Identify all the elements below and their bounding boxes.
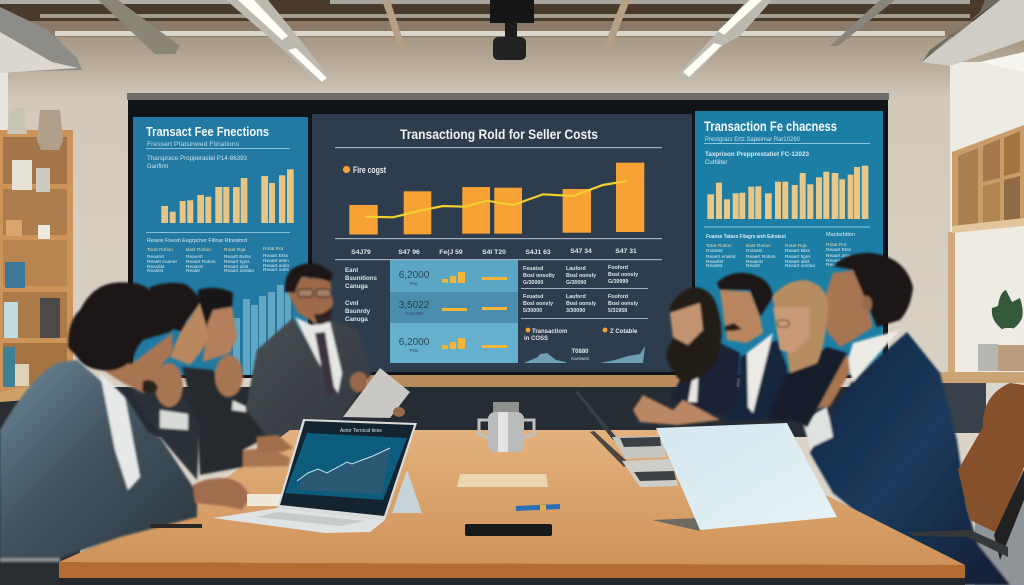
left row labels: Canuga bbox=[345, 283, 368, 290]
panel: center dashboard bbox=[312, 114, 692, 372]
left row labels: Cvnl bbox=[345, 300, 359, 307]
right heading: Transaction Fe chacness bbox=[704, 119, 837, 134]
right table text: Reastr bbox=[746, 263, 761, 269]
left table text: Reaarst bbox=[147, 254, 164, 260]
right detail table: Lauford bbox=[566, 294, 586, 300]
left subtitle: Fressert Pfatsinwed Ftinations bbox=[147, 142, 239, 148]
left table text: Reastt enanet bbox=[147, 259, 178, 265]
blue metric table: Pvic bbox=[410, 281, 419, 286]
left table text: Reastt Bxtss bbox=[224, 254, 252, 260]
person: man with mustache bbox=[717, 273, 787, 420]
wooden ledge and dark wainscot beneath display bbox=[80, 375, 890, 437]
blue metric table bbox=[390, 260, 518, 363]
right table text: Reaart Rotion bbox=[746, 254, 776, 260]
mini legends and area charts bbox=[524, 328, 645, 363]
panel: left dashboard: Ganfirm bbox=[147, 164, 168, 170]
bar chart: fee cost bbox=[349, 163, 644, 234]
laptop line chart bbox=[297, 448, 390, 494]
right detail table: Bosl oonsly bbox=[608, 301, 638, 307]
right detail table: Bosl oonsly bbox=[608, 272, 638, 278]
left table text: Torat Rotion bbox=[147, 247, 173, 253]
left table text: Reaart Etss bbox=[263, 253, 289, 259]
right detail table: 3/30090 bbox=[566, 308, 585, 314]
axis labels bbox=[351, 248, 637, 256]
right detail table: 5/31958 bbox=[608, 308, 627, 314]
projector bbox=[490, 0, 534, 60]
legend: Fire cogst bbox=[353, 165, 386, 175]
right table text: Reaart alsn bbox=[826, 253, 851, 259]
panel: right dashboard: Curtiliter bbox=[705, 160, 727, 166]
axis labels: S47 96 bbox=[398, 249, 420, 256]
right detail table: Feuatsd bbox=[523, 294, 543, 300]
left table text: Rotat Rot bbox=[263, 246, 284, 252]
ceiling with beams, pipes and lights bbox=[0, 0, 1024, 82]
right detail table: G/30000 bbox=[523, 280, 543, 286]
right table text: Rotat Rqa bbox=[785, 243, 807, 249]
axis labels: Fe(J 59 bbox=[439, 249, 463, 256]
right detail table: Fooford bbox=[608, 294, 628, 300]
left lower faded bars bbox=[233, 285, 291, 375]
white laptop lid bbox=[652, 423, 837, 531]
right wooden shelf and plant bbox=[938, 125, 1024, 383]
left row labels: Bsunrdy bbox=[345, 308, 371, 315]
chair bbox=[910, 383, 1024, 560]
left table text: Bast Rotion bbox=[186, 247, 211, 253]
right table text: Reaart Btss bbox=[785, 248, 811, 254]
right detail table: Fooford bbox=[608, 265, 628, 271]
legend bbox=[343, 165, 386, 175]
right subtitle: Prestgracr Ertz Sapeimar Rar10260 bbox=[705, 137, 801, 143]
left table text: Reaart atisn bbox=[263, 258, 289, 264]
left table text: Reastst bbox=[147, 268, 164, 274]
paper and pens bbox=[150, 474, 560, 528]
blue metric table: 3,5022 bbox=[399, 300, 430, 311]
right detail table bbox=[521, 265, 648, 319]
metal kettle bbox=[479, 402, 534, 452]
right detail table: 5/30000 bbox=[523, 308, 542, 314]
mini legends and area charts: T0880 bbox=[571, 349, 589, 355]
left row labels: Bsunitions bbox=[345, 275, 378, 282]
left bar chart bbox=[161, 169, 294, 223]
right table text: Fuanse Tataxs Fitagrs weh Edratest bbox=[706, 234, 786, 240]
left table text: Reaart tigss bbox=[224, 259, 250, 265]
trend line bbox=[365, 181, 627, 217]
large display wall bbox=[127, 93, 889, 378]
right table text: Bast Rotion bbox=[746, 243, 771, 249]
left table text bbox=[147, 238, 290, 274]
left row labels: Eanl bbox=[345, 267, 358, 274]
right table text: Reaart Etss bbox=[826, 247, 852, 253]
table bbox=[59, 430, 965, 585]
left table text: Reavrst bbox=[186, 254, 203, 260]
right table text: Reaart alist bbox=[785, 259, 810, 265]
right table text: Rotat Rot bbox=[826, 242, 847, 248]
right table text: Rotesst bbox=[706, 248, 723, 254]
right detail table: Bosl oonsly bbox=[566, 273, 596, 279]
person: blonde woman with glasses bbox=[767, 280, 847, 427]
person: foreground man with curly hair bbox=[0, 282, 250, 562]
right detail table: Bosl oonsly bbox=[523, 301, 553, 307]
right table text: Reaart onstan bbox=[785, 263, 815, 269]
axis labels: S47 31 bbox=[615, 248, 637, 255]
left table text: Reaart aolst bbox=[263, 263, 290, 269]
mini legends and area charts: in COSS bbox=[524, 336, 548, 342]
right detail table: G/30090 bbox=[566, 280, 586, 286]
left table text: Reaart oolts bbox=[263, 267, 289, 273]
mid-table laptops bbox=[575, 391, 678, 487]
blue metric table: 6,2000 bbox=[399, 270, 430, 281]
front laptop with line chart bbox=[213, 419, 422, 533]
laptop header: Aetor Ternicat tiese bbox=[340, 428, 382, 434]
left heading: Transact Fee Fnections bbox=[146, 125, 269, 139]
left bookshelf bbox=[0, 108, 73, 402]
right table text bbox=[706, 232, 855, 269]
person: seated woman in dark suit bbox=[130, 283, 210, 480]
blue metric table: Pvic bbox=[410, 348, 419, 353]
left table text: Reavie Fivesh Eagrpcher Fitinar Rtreatord bbox=[147, 238, 247, 244]
axis labels: S4J79 bbox=[351, 249, 371, 256]
blue metric table: 6,2000 bbox=[399, 337, 430, 348]
right bar chart bbox=[707, 166, 868, 219]
right detail table: Feuatsd bbox=[523, 266, 543, 272]
right detail table: Bosl oonsly bbox=[566, 301, 596, 307]
person: presenter bbox=[245, 263, 372, 440]
left table text: Reaolist bbox=[147, 264, 165, 270]
right detail table: Bosl onsolty bbox=[523, 273, 555, 279]
mini legends and area charts: Z Cotable bbox=[610, 329, 638, 335]
person: man on right, hidden behind table bbox=[802, 253, 1010, 585]
panel: left dashboard bbox=[133, 117, 308, 375]
left table text: Reaart onstan bbox=[224, 268, 254, 274]
left table text: Reaart Rotion bbox=[186, 259, 216, 265]
right table text: Totat Rotion bbox=[706, 243, 732, 249]
right table text: Reaart tigss bbox=[785, 254, 811, 260]
mini legends and area charts: Karstuist bbox=[571, 356, 589, 361]
left row labels: Canuga bbox=[345, 316, 368, 323]
right table text: Reaarst bbox=[746, 259, 763, 265]
presenter's silver laptop bbox=[343, 368, 410, 418]
left table text: Reastr bbox=[186, 268, 201, 274]
right table text: Reaolist bbox=[706, 259, 724, 265]
left table text: Reaarst bbox=[186, 264, 203, 270]
left chart caption: Tharsprace Propperastel P14-86393 bbox=[147, 155, 247, 162]
right table text: Mantsrbtten bbox=[826, 232, 855, 238]
right table text: Reaart oolts bbox=[826, 262, 852, 268]
right table text: Reastst bbox=[706, 263, 723, 269]
axis labels: S4J1 63 bbox=[525, 249, 551, 256]
center heading: Transactiong Rold for Seller Costs bbox=[400, 126, 598, 142]
left row labels bbox=[345, 267, 378, 323]
right detail table: Lauford bbox=[566, 266, 586, 272]
person: seated man, third in row bbox=[182, 288, 293, 475]
right detail table: G/39999 bbox=[608, 279, 628, 285]
display frame bbox=[128, 96, 888, 378]
person: woman on right with dark hair bbox=[633, 287, 740, 425]
light fixtures bbox=[226, 0, 772, 82]
axis labels: S4l T20 bbox=[482, 249, 506, 256]
left table text: Rotat Rqa bbox=[224, 247, 246, 253]
right table text: Reaart olst bbox=[826, 258, 850, 264]
right chart caption: Taxprison Prepprestatiet FC-12023 bbox=[705, 151, 809, 158]
panel: right dashboard bbox=[695, 111, 883, 375]
right table text: Rotesst bbox=[746, 248, 763, 254]
mini legends and area charts: Transactiom bbox=[532, 329, 567, 335]
blue metric table: 3.15 000 bbox=[405, 311, 423, 316]
axis labels: S47 34 bbox=[570, 248, 592, 255]
left table text: Reaart alist bbox=[224, 264, 249, 270]
right table text: Reasrt enwtot bbox=[706, 254, 736, 260]
phone bbox=[465, 524, 552, 536]
